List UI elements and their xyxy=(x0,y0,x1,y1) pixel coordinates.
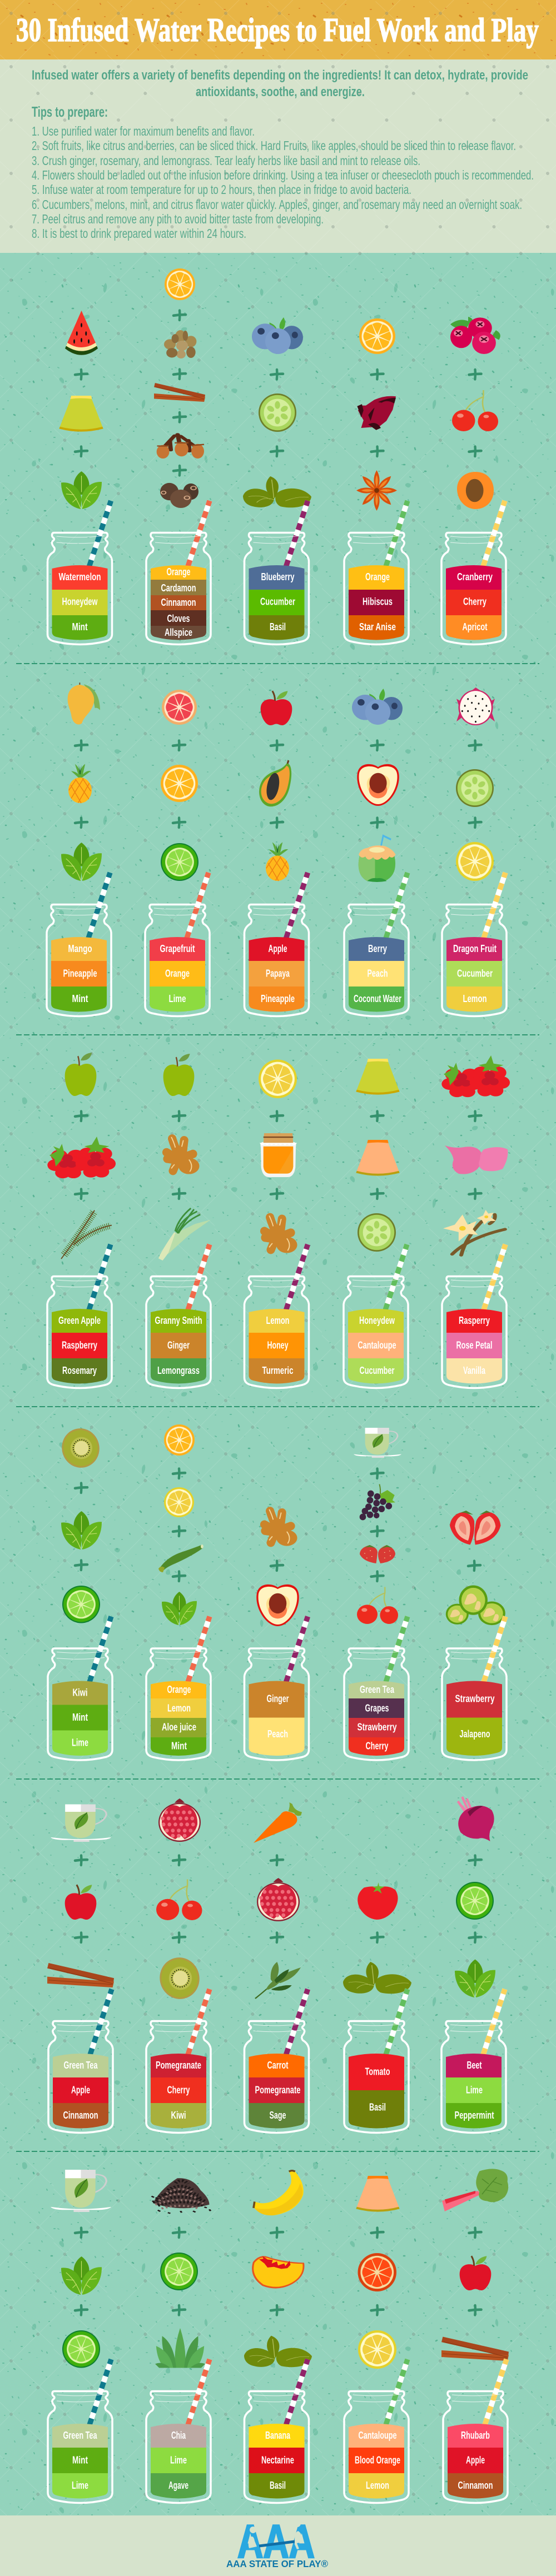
jar: green tea grapes strawberry cherry: Strawberry xyxy=(357,1721,397,1733)
jar: watermelon honeydew mint: Honeydew xyxy=(62,596,98,607)
icon: basil xyxy=(243,476,311,507)
icon: apple xyxy=(460,2256,491,2290)
icon: aloe xyxy=(158,1544,203,1572)
jar: grapefruit orange lime: Grapefruit xyxy=(160,943,195,954)
jar: lemon honey turmeric: Lemon xyxy=(266,1314,289,1326)
jar: grapefruit orange lime: Orange xyxy=(165,967,190,979)
jar: green tea apple cinnamon xyxy=(48,1989,113,2133)
icon: jalapeno xyxy=(446,1585,505,1625)
jar: rhubarb apple cinnamon: Apple xyxy=(466,2454,485,2465)
section 3 plus signs xyxy=(75,1112,481,1199)
jar: orange lemon aloe juice mint: Orange xyxy=(167,1683,191,1695)
icon: honeydew xyxy=(356,1059,399,1094)
tips list xyxy=(32,124,534,241)
icon: dragon fruit xyxy=(456,687,495,725)
icon: apple xyxy=(65,1885,96,1920)
icon: grapes xyxy=(360,1484,395,1520)
jar: green tea grapes strawberry cherry: Green Tea xyxy=(360,1683,394,1695)
icon: lemongrass xyxy=(158,1208,211,1260)
jar: rasperry rose petal vanilla xyxy=(442,1244,507,1388)
section 6 plus signs xyxy=(75,2228,481,2315)
jar: green apple raspberry rosemary: Green Apple xyxy=(58,1314,101,1326)
jar: granny smith ginger lemongrass: Granny Smith xyxy=(155,1314,202,1326)
jar: chia lime agave: Agave xyxy=(168,2479,188,2491)
jar: pomegranate cherry kiwi: Kiwi xyxy=(171,2109,186,2121)
jar: cranberry cherry apricot: Cranberry xyxy=(457,571,493,582)
icon: cinnamon xyxy=(154,383,205,402)
icon: allspice xyxy=(160,483,198,508)
jar: berry peach coconut water: Berry xyxy=(368,943,387,954)
jar: chia lime agave xyxy=(146,2359,211,2503)
icon: ginger xyxy=(265,1509,297,1546)
icon: carrot xyxy=(254,1802,302,1843)
icon: lime xyxy=(62,2330,100,2368)
jar: beet lime peppermint: Beet xyxy=(467,2059,481,2071)
jar: rhubarb apple cinnamon: Rhubarb xyxy=(461,2429,490,2441)
icon: lemon xyxy=(456,842,494,881)
jar: green apple raspberry rosemary xyxy=(47,1244,112,1388)
icon: blueberry xyxy=(352,689,403,725)
jar: ginger peach: Ginger xyxy=(267,1693,289,1704)
jar: green tea grapes strawberry cherry: Cherry xyxy=(366,1740,389,1752)
icon: rose petal xyxy=(445,1145,508,1174)
icon: cherry xyxy=(452,390,498,431)
jar: cantaloupe blood orange lemon xyxy=(344,2359,409,2503)
section 1 plus signs xyxy=(75,310,481,476)
jar: rasperry rose petal vanilla: Rose Petal xyxy=(456,1339,493,1351)
jar: kiwi mint lime xyxy=(48,1616,112,1760)
jar: pomegranate cherry kiwi xyxy=(146,1989,211,2133)
jar: cranberry cherry apricot xyxy=(441,501,506,645)
jar: mango pineapple mint: Pineapple xyxy=(63,967,97,979)
section 5 ingredients xyxy=(47,1797,495,2004)
icon: cucumber xyxy=(358,1213,396,1252)
jar: beet lime peppermint xyxy=(441,1989,506,2133)
icon: kiwi xyxy=(57,1423,105,1473)
jar: green apple raspberry rosemary: Raspberry xyxy=(62,1339,97,1351)
icon: cranberry xyxy=(450,317,500,354)
jar: orange hibiscus star anise: Hibiscus xyxy=(363,596,393,607)
icon: green tea xyxy=(354,1428,401,1458)
section 6 ingredients xyxy=(51,2169,509,2369)
icon: mint xyxy=(61,2256,102,2295)
section 4 ingredients xyxy=(57,1423,505,1626)
icon: strawberry xyxy=(360,1545,395,1563)
jar: rasperry rose petal vanilla: Rasperry xyxy=(459,1314,490,1326)
jar: green tea apple cinnamon: Apple xyxy=(71,2084,90,2095)
jar: orange cardamon cinnamon cloves allspice: Cinnamon xyxy=(161,596,196,608)
icon: lime xyxy=(161,843,198,881)
icon: mint xyxy=(61,1511,102,1549)
icon: orange xyxy=(359,318,395,354)
section 5 plus signs xyxy=(75,1855,481,1942)
icon: basil xyxy=(343,1962,411,1994)
jar: carrot pomegranate sage: Carrot xyxy=(267,2059,288,2071)
jar: honeydew cantaloupe cucumber: Cucumber xyxy=(359,1364,395,1376)
icon: lime xyxy=(62,1586,100,1623)
jar: watermelon honeydew mint: Mint xyxy=(72,621,88,632)
icon: sage xyxy=(255,1962,301,1999)
jar: dragon fruit cucumber lemon: Dragon Fruit xyxy=(453,943,497,954)
jar: green tea grapes strawberry cherry: Grapes xyxy=(365,1702,389,1714)
jar: banana nectarine basil: Basil xyxy=(270,2479,286,2491)
jar: grapefruit orange lime: Lime xyxy=(168,993,186,1004)
icon: ginger xyxy=(167,1137,200,1174)
icon: cardamom xyxy=(164,330,196,358)
icon: chia xyxy=(152,2178,211,2214)
icon: lemon xyxy=(358,2330,396,2369)
jar: orange hibiscus star anise: Orange xyxy=(365,571,390,582)
icon: orange xyxy=(164,1424,195,1456)
icon: watermelon xyxy=(65,311,98,355)
tips list: 1. Use purified water for maximum benefits and flavor. xyxy=(32,124,255,138)
tips list: 3. Crush ginger, rosemary, and lemongrass. Tear leafy herbs like basil and mint to release oils. xyxy=(32,153,420,168)
panel: intro background xyxy=(0,59,556,253)
jar: blueberry cucumber basil: Basil xyxy=(270,621,286,632)
section 2 ingredients xyxy=(61,682,495,882)
jar: kiwi mint lime: Lime xyxy=(72,1736,88,1748)
icon: cherry xyxy=(156,1880,202,1920)
jar: orange lemon aloe juice mint: Mint xyxy=(171,1740,187,1752)
jar: dragon fruit cucumber lemon: Cucumber xyxy=(457,967,493,979)
jar: honeydew cantaloupe cucumber: Cantaloupe xyxy=(358,1339,396,1351)
icon: agave xyxy=(155,2328,205,2368)
icon: apple xyxy=(261,691,292,725)
jar: green apple raspberry rosemary: Rosemary xyxy=(62,1364,97,1376)
jar: mango pineapple mint: Mint xyxy=(72,993,88,1004)
jar: kiwi mint lime: Kiwi xyxy=(72,1686,88,1698)
jar: orange cardamon cinnamon cloves allspice: Orange xyxy=(167,566,190,577)
jar: honeydew cantaloupe cucumber: Honeydew xyxy=(359,1314,395,1326)
icon: pineapple xyxy=(68,764,92,803)
icon: lemon xyxy=(164,1487,194,1517)
icon: green apple xyxy=(65,1053,96,1096)
icon: star anise xyxy=(356,470,397,511)
panel: header band xyxy=(0,0,556,59)
icon: rosemary xyxy=(61,1210,112,1259)
jar: apple papaya pineapple: Pineapple xyxy=(261,993,295,1004)
jar: tomato basil xyxy=(344,1989,409,2133)
icon: coconut xyxy=(359,836,396,882)
jar: orange cardamon cinnamon cloves allspice xyxy=(146,501,211,645)
icon: cherry xyxy=(357,1587,398,1624)
jar: mango pineapple mint xyxy=(47,873,111,1016)
icon: cinnamon xyxy=(47,1963,114,1987)
jar: banana nectarine basil: Nectarine xyxy=(261,2454,294,2465)
jar: honeydew cantaloupe cucumber xyxy=(344,1244,408,1388)
jar: orange hibiscus star anise xyxy=(344,501,409,645)
jar: tomato basil: Basil xyxy=(369,2101,386,2113)
icon: honeydew xyxy=(59,396,103,431)
jar: chia lime agave: Chia xyxy=(171,2429,186,2441)
icon: pomegranate xyxy=(158,1798,201,1842)
icon: mint xyxy=(61,471,102,509)
jar: carrot pomegranate sage xyxy=(245,1989,309,2133)
icon: vanilla xyxy=(443,1210,505,1255)
icon: lemon xyxy=(259,1059,297,1098)
icon: cucumber xyxy=(456,769,494,807)
jar: dragon fruit cucumber lemon xyxy=(442,873,507,1016)
jar: grapefruit orange lime xyxy=(145,873,210,1016)
jar: blueberry cucumber basil: Cucumber xyxy=(260,596,295,607)
icon: basil xyxy=(244,2336,312,2367)
jar: strawberry jalapeno: Strawberry xyxy=(455,1693,495,1704)
jar: mango pineapple mint: Mango xyxy=(68,943,92,954)
jar: berry peach coconut water: Coconut Water xyxy=(354,993,401,1004)
jar: kiwi mint lime: Mint xyxy=(72,1711,88,1723)
icon: lime xyxy=(160,2253,198,2290)
jar: lemon honey turmeric xyxy=(245,1244,309,1388)
icon: peppermint xyxy=(455,1960,495,1997)
jar: lemon honey turmeric: Honey xyxy=(267,1339,289,1351)
jar: berry peach coconut water: Peach xyxy=(367,967,388,979)
jar: blueberry cucumber basil xyxy=(245,501,309,645)
jar: green tea mint lime: Mint xyxy=(72,2454,88,2465)
icon: papaya xyxy=(259,760,291,806)
jar: blueberry cucumber basil: Blueberry xyxy=(261,571,295,582)
icon: turmeric xyxy=(265,1215,297,1253)
icon: raspberry xyxy=(441,1055,510,1097)
jar: orange lemon aloe juice mint xyxy=(146,1616,211,1760)
jar: rhubarb apple cinnamon: Cinnamon xyxy=(458,2479,493,2491)
icon: tomato xyxy=(358,1882,398,1920)
icon: cantaloupe xyxy=(356,2176,399,2211)
jar: carrot pomegranate sage: Pomegranate xyxy=(255,2084,300,2095)
jar: strawberry jalapeno xyxy=(442,1616,507,1760)
icon: mango xyxy=(68,682,100,725)
jar: pomegranate cherry kiwi: Pomegranate xyxy=(156,2059,201,2071)
section 1 ingredients xyxy=(59,268,500,511)
jar: banana nectarine basil xyxy=(245,2359,309,2503)
jar: orange cardamon cinnamon cloves allspice: Allspice xyxy=(165,626,192,638)
jar: ginger peach xyxy=(245,1616,309,1760)
jar: green tea apple cinnamon: Cinnamon xyxy=(63,2109,98,2121)
icon: apricot xyxy=(457,472,494,509)
jar: orange lemon aloe juice mint: Aloe juice xyxy=(162,1721,196,1733)
icon: rhubarb xyxy=(442,2169,508,2211)
icon: honey xyxy=(260,1133,297,1177)
tips list: 5. Infuse water at room temperature for up to 2 hours, then place in fridge to avoid bacteria. xyxy=(32,182,411,197)
icon: pomegranate xyxy=(257,1878,300,1921)
jar: orange cardamon cinnamon cloves allspice: Cardamon xyxy=(161,582,196,594)
jar: orange cardamon cinnamon cloves allspice: Cloves xyxy=(167,612,190,624)
icon: nectarine xyxy=(252,2256,305,2289)
icon: orange xyxy=(165,268,195,300)
icon: raspberry xyxy=(47,1137,116,1178)
section 3 ingredients xyxy=(47,1053,510,1260)
logo: AAA State of Play: AAA xyxy=(237,2515,315,2568)
jar: beet lime peppermint: Lime xyxy=(466,2084,483,2095)
jar: apple papaya pineapple xyxy=(245,873,309,1016)
icon: orange xyxy=(161,765,198,802)
intro text xyxy=(32,68,528,99)
jar: watermelon honeydew mint: Watermelon xyxy=(59,571,101,582)
icon: cantaloupe xyxy=(356,1140,399,1175)
icon: pineapple xyxy=(266,842,289,881)
jar: green tea mint lime: Lime xyxy=(72,2479,88,2491)
icon: lime xyxy=(456,1882,494,1920)
section 4 plus signs xyxy=(75,1468,480,1581)
jar: carrot pomegranate sage: Sage xyxy=(269,2109,286,2121)
jar: tomato basil: Tomato xyxy=(365,2065,390,2077)
icon: blueberry xyxy=(252,317,303,354)
icon: cucumber xyxy=(259,393,296,432)
tips heading: Tips to prepare: xyxy=(32,103,108,120)
jar: chia lime agave: Lime xyxy=(170,2454,187,2465)
icon: beet xyxy=(458,1797,494,1841)
jar: cranberry cherry apricot: Cherry xyxy=(463,596,487,607)
jar: cranberry cherry apricot: Apricot xyxy=(463,621,487,632)
icon: hibiscus xyxy=(357,396,396,430)
icon: granny smith apple xyxy=(163,1054,194,1096)
jar: banana nectarine basil: Banana xyxy=(265,2429,290,2441)
jar: cantaloupe blood orange lemon: Blood Orange xyxy=(355,2454,400,2465)
jar: apple papaya pineapple: Papaya xyxy=(266,967,290,979)
icon: grapefruit xyxy=(162,690,197,725)
jar: cantaloupe blood orange lemon: Cantaloupe xyxy=(358,2429,397,2441)
icon: cloves xyxy=(157,434,204,459)
icon: green tea xyxy=(51,2170,111,2212)
jar: green tea grapes strawberry cherry xyxy=(344,1616,409,1760)
jar: granny smith ginger lemongrass: Lemongrass xyxy=(157,1364,200,1376)
jar: granny smith ginger lemongrass xyxy=(146,1244,211,1388)
tips list: 8. It is best to drink prepared water within 24 hours. xyxy=(32,226,246,241)
icon: strawberry halves xyxy=(450,1511,500,1545)
jar: cantaloupe blood orange lemon: Lemon xyxy=(366,2479,389,2491)
icon: cinnamon xyxy=(441,2336,509,2361)
jar: berry peach coconut water xyxy=(344,873,409,1016)
jar: green tea mint lime xyxy=(48,2359,112,2503)
icon: peach xyxy=(256,1585,299,1626)
jar: ginger peach: Peach xyxy=(267,1728,288,1740)
section 2 plus signs xyxy=(75,740,481,828)
icon: green tea xyxy=(51,1804,111,1842)
icon: kiwi xyxy=(155,1952,205,2004)
jar: strawberry jalapeno: Jalapeno xyxy=(459,1728,490,1740)
icon: blood orange xyxy=(358,2253,396,2291)
tips list: 7. Peel citrus and remove any pith to avoid bitter taste from developing. xyxy=(32,212,324,226)
intro text: antioxidants, soothe, and energize. xyxy=(196,84,365,99)
jar: green tea apple cinnamon: Green Tea xyxy=(63,2059,98,2071)
jar: rhubarb apple cinnamon xyxy=(443,2359,508,2503)
jar: beet lime peppermint: Peppermint xyxy=(455,2109,494,2121)
jar: watermelon honeydew mint xyxy=(48,501,112,645)
jar: granny smith ginger lemongrass: Ginger xyxy=(167,1339,190,1351)
jar: orange lemon aloe juice mint: Lemon xyxy=(167,1702,191,1714)
icon: mint xyxy=(162,1592,197,1625)
jar: orange hibiscus star anise: Star Anise xyxy=(359,621,396,632)
jar: lemon honey turmeric: Turmeric xyxy=(262,1364,294,1376)
logo: AAA State of Play: AAA STATE OF PLAY® xyxy=(226,2558,328,2569)
icon: peach xyxy=(357,764,399,806)
icon: mint xyxy=(61,843,102,881)
jar: rasperry rose petal vanilla: Vanilla xyxy=(463,1364,485,1376)
jar: apple papaya pineapple: Apple xyxy=(268,943,287,954)
icon: banana xyxy=(254,2171,304,2215)
panel: footer xyxy=(0,2515,556,2576)
jar: green tea mint lime: Green Tea xyxy=(63,2429,97,2441)
jar: pomegranate cherry kiwi: Cherry xyxy=(167,2084,190,2095)
jar: dragon fruit cucumber lemon: Lemon xyxy=(463,993,487,1004)
